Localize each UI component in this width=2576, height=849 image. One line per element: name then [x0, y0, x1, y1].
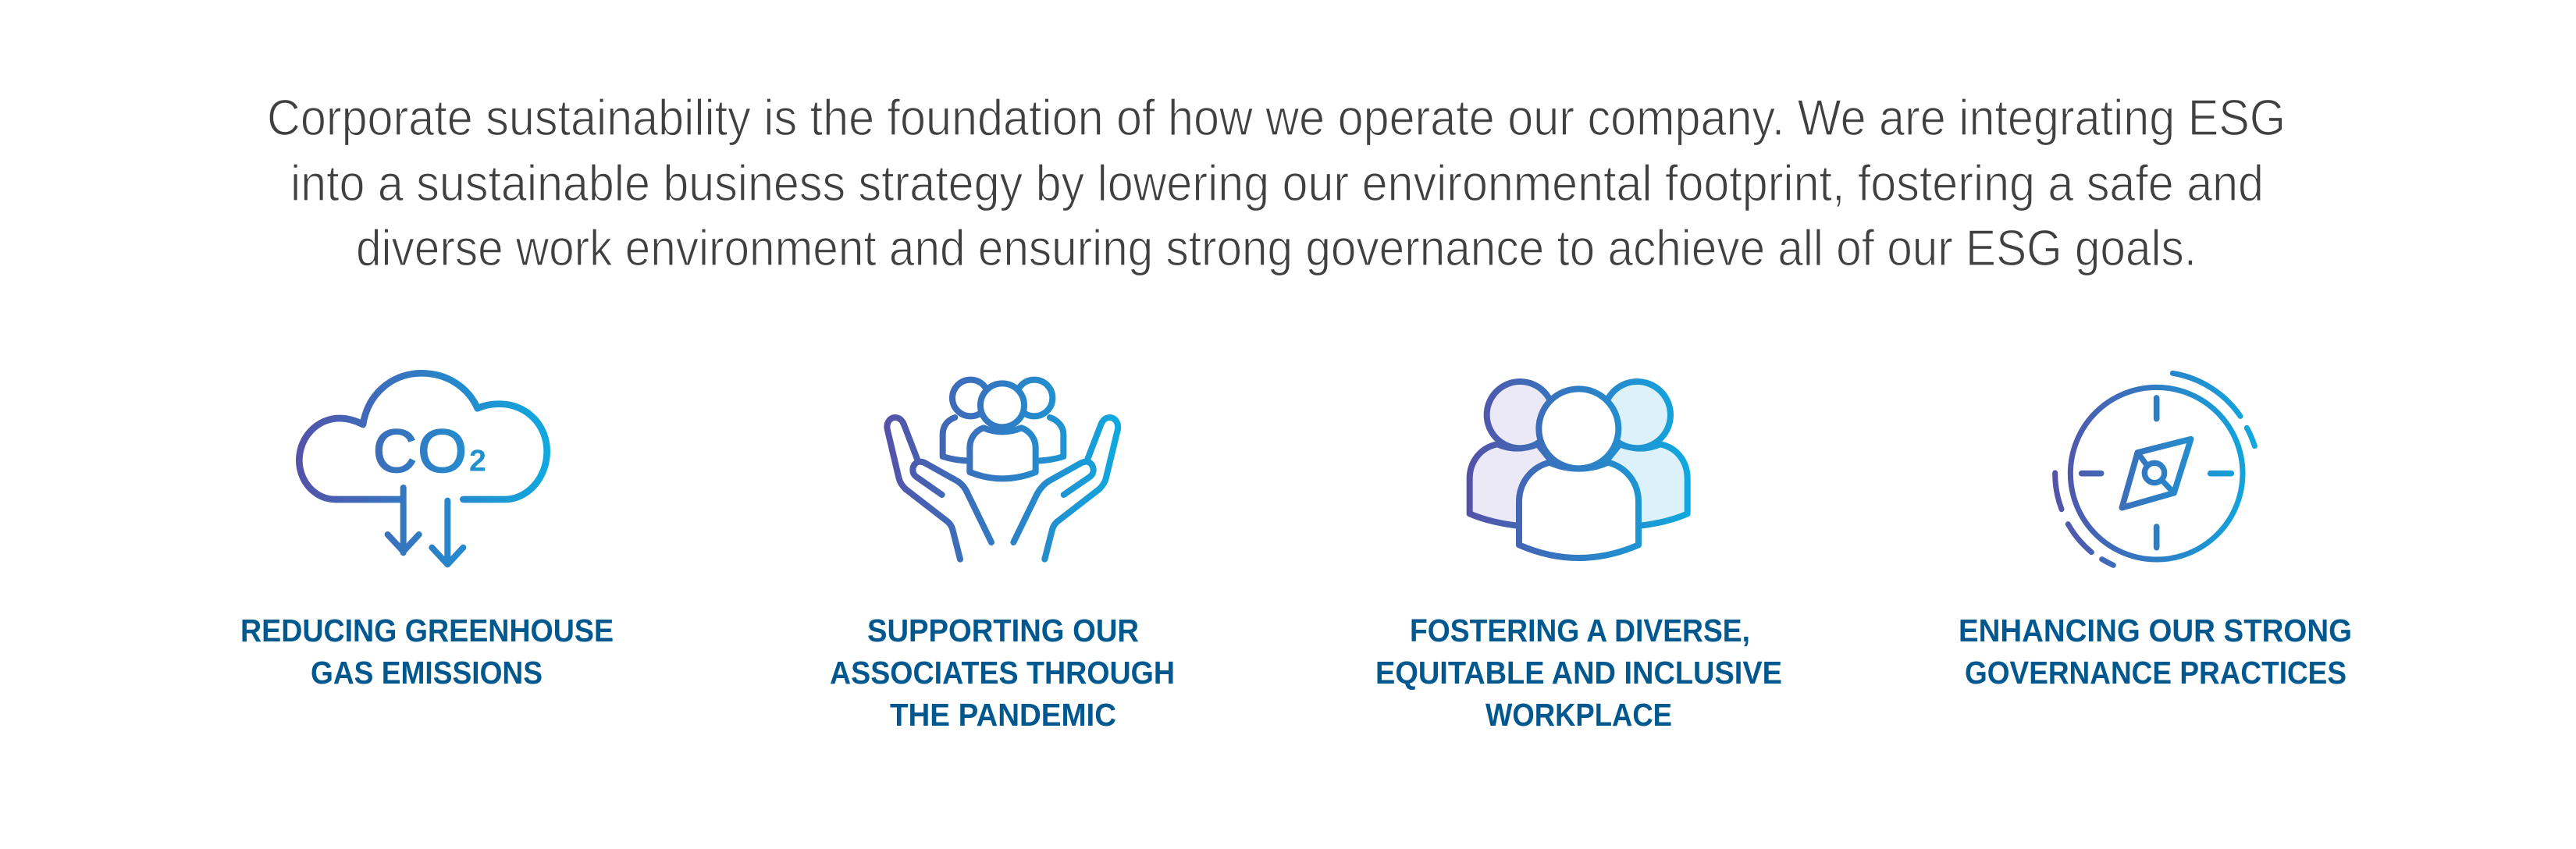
intro text block: into a sustainable business strategy by lowering our environmental footprint, fostering a safe and [290, 155, 2264, 211]
icon: hands holding people [887, 380, 1118, 559]
panel: reducing greenhouse gas emissions [240, 373, 614, 691]
label: supporting our associates through the pandemic [830, 613, 1175, 733]
intro text block: Corporate sustainability is the foundation of how we operate our company. We are integrating ESG [267, 89, 2286, 146]
intro text block: diverse work environment and ensuring strong governance to achieve all of our ESG goals. [356, 219, 2197, 276]
label: fostering a diverse, equitable and inclusive workplace: FOSTERING A DIVERSE, [1410, 613, 1750, 648]
panel: fostering a diverse, equitable and inclusive workplace [1375, 382, 1782, 733]
label: supporting our associates through the pandemic: SUPPORTING OUR [867, 613, 1139, 648]
panel: enhancing our strong governance practices [1959, 373, 2352, 691]
label: supporting our associates through the pandemic: THE PANDEMIC [890, 697, 1116, 733]
intro text block [267, 89, 2286, 276]
label: enhancing our strong governance practices [1959, 613, 2352, 691]
icon: CO2 cloud with down arrows: 2 [469, 443, 486, 478]
label: reducing greenhouse gas emissions [240, 613, 614, 691]
icon: CO2 cloud with down arrows: C [373, 416, 417, 485]
icon: CO2 cloud with down arrows: O [418, 416, 467, 485]
panel: supporting our associates through the pandemic [830, 380, 1175, 733]
label: enhancing our strong governance practices: ENHANCING OUR STRONG [1959, 613, 2352, 648]
label: reducing greenhouse gas emissions: REDUCING GREENHOUSE [240, 613, 614, 648]
label: fostering a diverse, equitable and inclusive workplace [1375, 613, 1782, 733]
icon: compass [2055, 373, 2254, 565]
label: fostering a diverse, equitable and inclusive workplace: EQUITABLE AND INCLUSIVE [1375, 655, 1782, 691]
icon: three people [1470, 382, 1688, 558]
label: enhancing our strong governance practices: GOVERNANCE PRACTICES [1965, 655, 2347, 691]
label: reducing greenhouse gas emissions: GAS EMISSIONS [311, 655, 543, 691]
label: supporting our associates through the pandemic: ASSOCIATES THROUGH [830, 655, 1175, 691]
label: fostering a diverse, equitable and inclusive workplace: WORKPLACE [1485, 697, 1672, 733]
icon: CO2 cloud with down arrows [299, 373, 547, 564]
